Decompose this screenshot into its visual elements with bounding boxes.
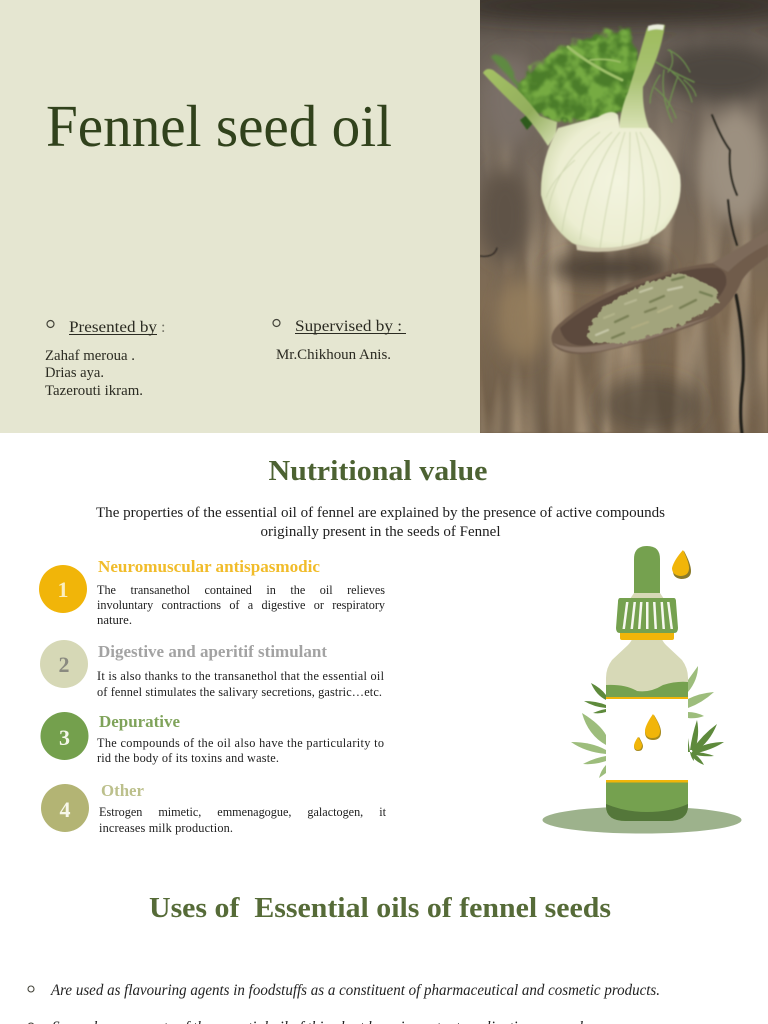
yellow collar	[620, 631, 674, 640]
bottle glass	[606, 636, 688, 700]
body 2	[97, 669, 385, 699]
seeds pile	[587, 273, 718, 343]
right airy frond	[650, 50, 696, 122]
body 1: nature.	[97, 613, 132, 627]
item 1: neuromuscular antispasmodic	[39, 557, 385, 627]
heading: nutritional value: Nutritional value	[268, 455, 488, 487]
supervisor block	[273, 318, 406, 363]
panel: title header	[0, 0, 480, 433]
presenters block: Drias aya.	[45, 365, 104, 381]
bottle body	[606, 682, 688, 825]
presenters block: Zahaf meroua .	[45, 348, 135, 364]
badge 3: 3	[59, 725, 70, 750]
body 4	[99, 805, 386, 835]
presenters block: Presented by	[69, 319, 157, 336]
badge 1: 1	[58, 577, 68, 602]
illustration: essential oil dropper bottle	[542, 546, 742, 834]
oil drop, falling	[672, 550, 691, 579]
body 1: The transanethol contained in the oil relieves	[97, 583, 385, 597]
hemp leaves, right	[688, 666, 714, 718]
item 2: digestive and aperitif stimulant	[40, 640, 385, 699]
wood cracks	[480, 115, 743, 433]
badge 3	[40, 712, 88, 760]
badge 4	[41, 784, 89, 832]
intro text: The properties of the essential oil of fennel are explained by the presence of active compounds	[96, 505, 665, 521]
presenters block: Tazerouti ikram.	[45, 383, 143, 399]
stalks	[483, 24, 665, 146]
presenters block: :	[161, 319, 165, 336]
body 1	[97, 583, 385, 627]
uses list	[28, 982, 660, 1024]
heading 3: Depurative	[99, 712, 180, 731]
badge 1	[39, 565, 87, 613]
photo: fennel bulb and seeds on spoon	[455, 0, 768, 433]
fronds mass	[510, 28, 638, 120]
supervisor block: Supervised by :	[295, 318, 402, 335]
hemp leaves, left	[571, 713, 606, 778]
heading 4: Other	[101, 781, 144, 800]
intro text	[96, 505, 665, 540]
body 2: It is also thanks to the transanethol that the essential oil	[97, 669, 385, 683]
presenters block	[45, 319, 165, 399]
wood grain	[480, 90, 768, 433]
badge 2: 2	[58, 652, 70, 677]
body 3	[97, 736, 384, 765]
dropper bulb	[634, 546, 660, 594]
heading: uses of essential oils: Uses of Essential oils of fennel seeds	[149, 892, 611, 924]
oil drops on label	[634, 714, 661, 751]
item 3: depurative	[40, 712, 384, 765]
badge 2	[40, 640, 88, 688]
body 1: involuntary contractions of a digestive or respiratory	[97, 598, 385, 612]
list item 1: Are used as flavouring agents in foodstuffs as a constituent of pharmaceutical and cosmetic products.	[50, 982, 660, 999]
body 3: The compounds of the oil also have the particularity to	[97, 736, 384, 750]
heading 1: Neuromuscular antispasmodic	[98, 557, 320, 576]
body 4: Estrogen mimetic, emmenagogue, galactogen, it	[99, 805, 386, 819]
badge 4: 4	[60, 797, 70, 822]
heading 2: Digestive and aperitif stimulant	[98, 642, 328, 661]
spoon	[551, 230, 768, 354]
fronds underlayer	[490, 28, 638, 120]
body 4: increases milk production.	[99, 821, 233, 835]
supervisor block: Mr.Chikhoun Anis.	[276, 347, 391, 363]
body 2: of fennel stimulates the salivary secretions, gastric…etc.	[97, 685, 382, 699]
ground shadow	[542, 806, 742, 834]
ribbed cap	[616, 598, 678, 633]
title: Fennel seed oil	[46, 93, 392, 159]
body 3: rid the body of its toxins and waste.	[97, 751, 279, 765]
intro text: originally present in the seeds of Fennel	[260, 524, 501, 540]
frond midribs	[568, 47, 622, 80]
item 4: other	[41, 781, 386, 835]
bulb	[541, 112, 681, 252]
